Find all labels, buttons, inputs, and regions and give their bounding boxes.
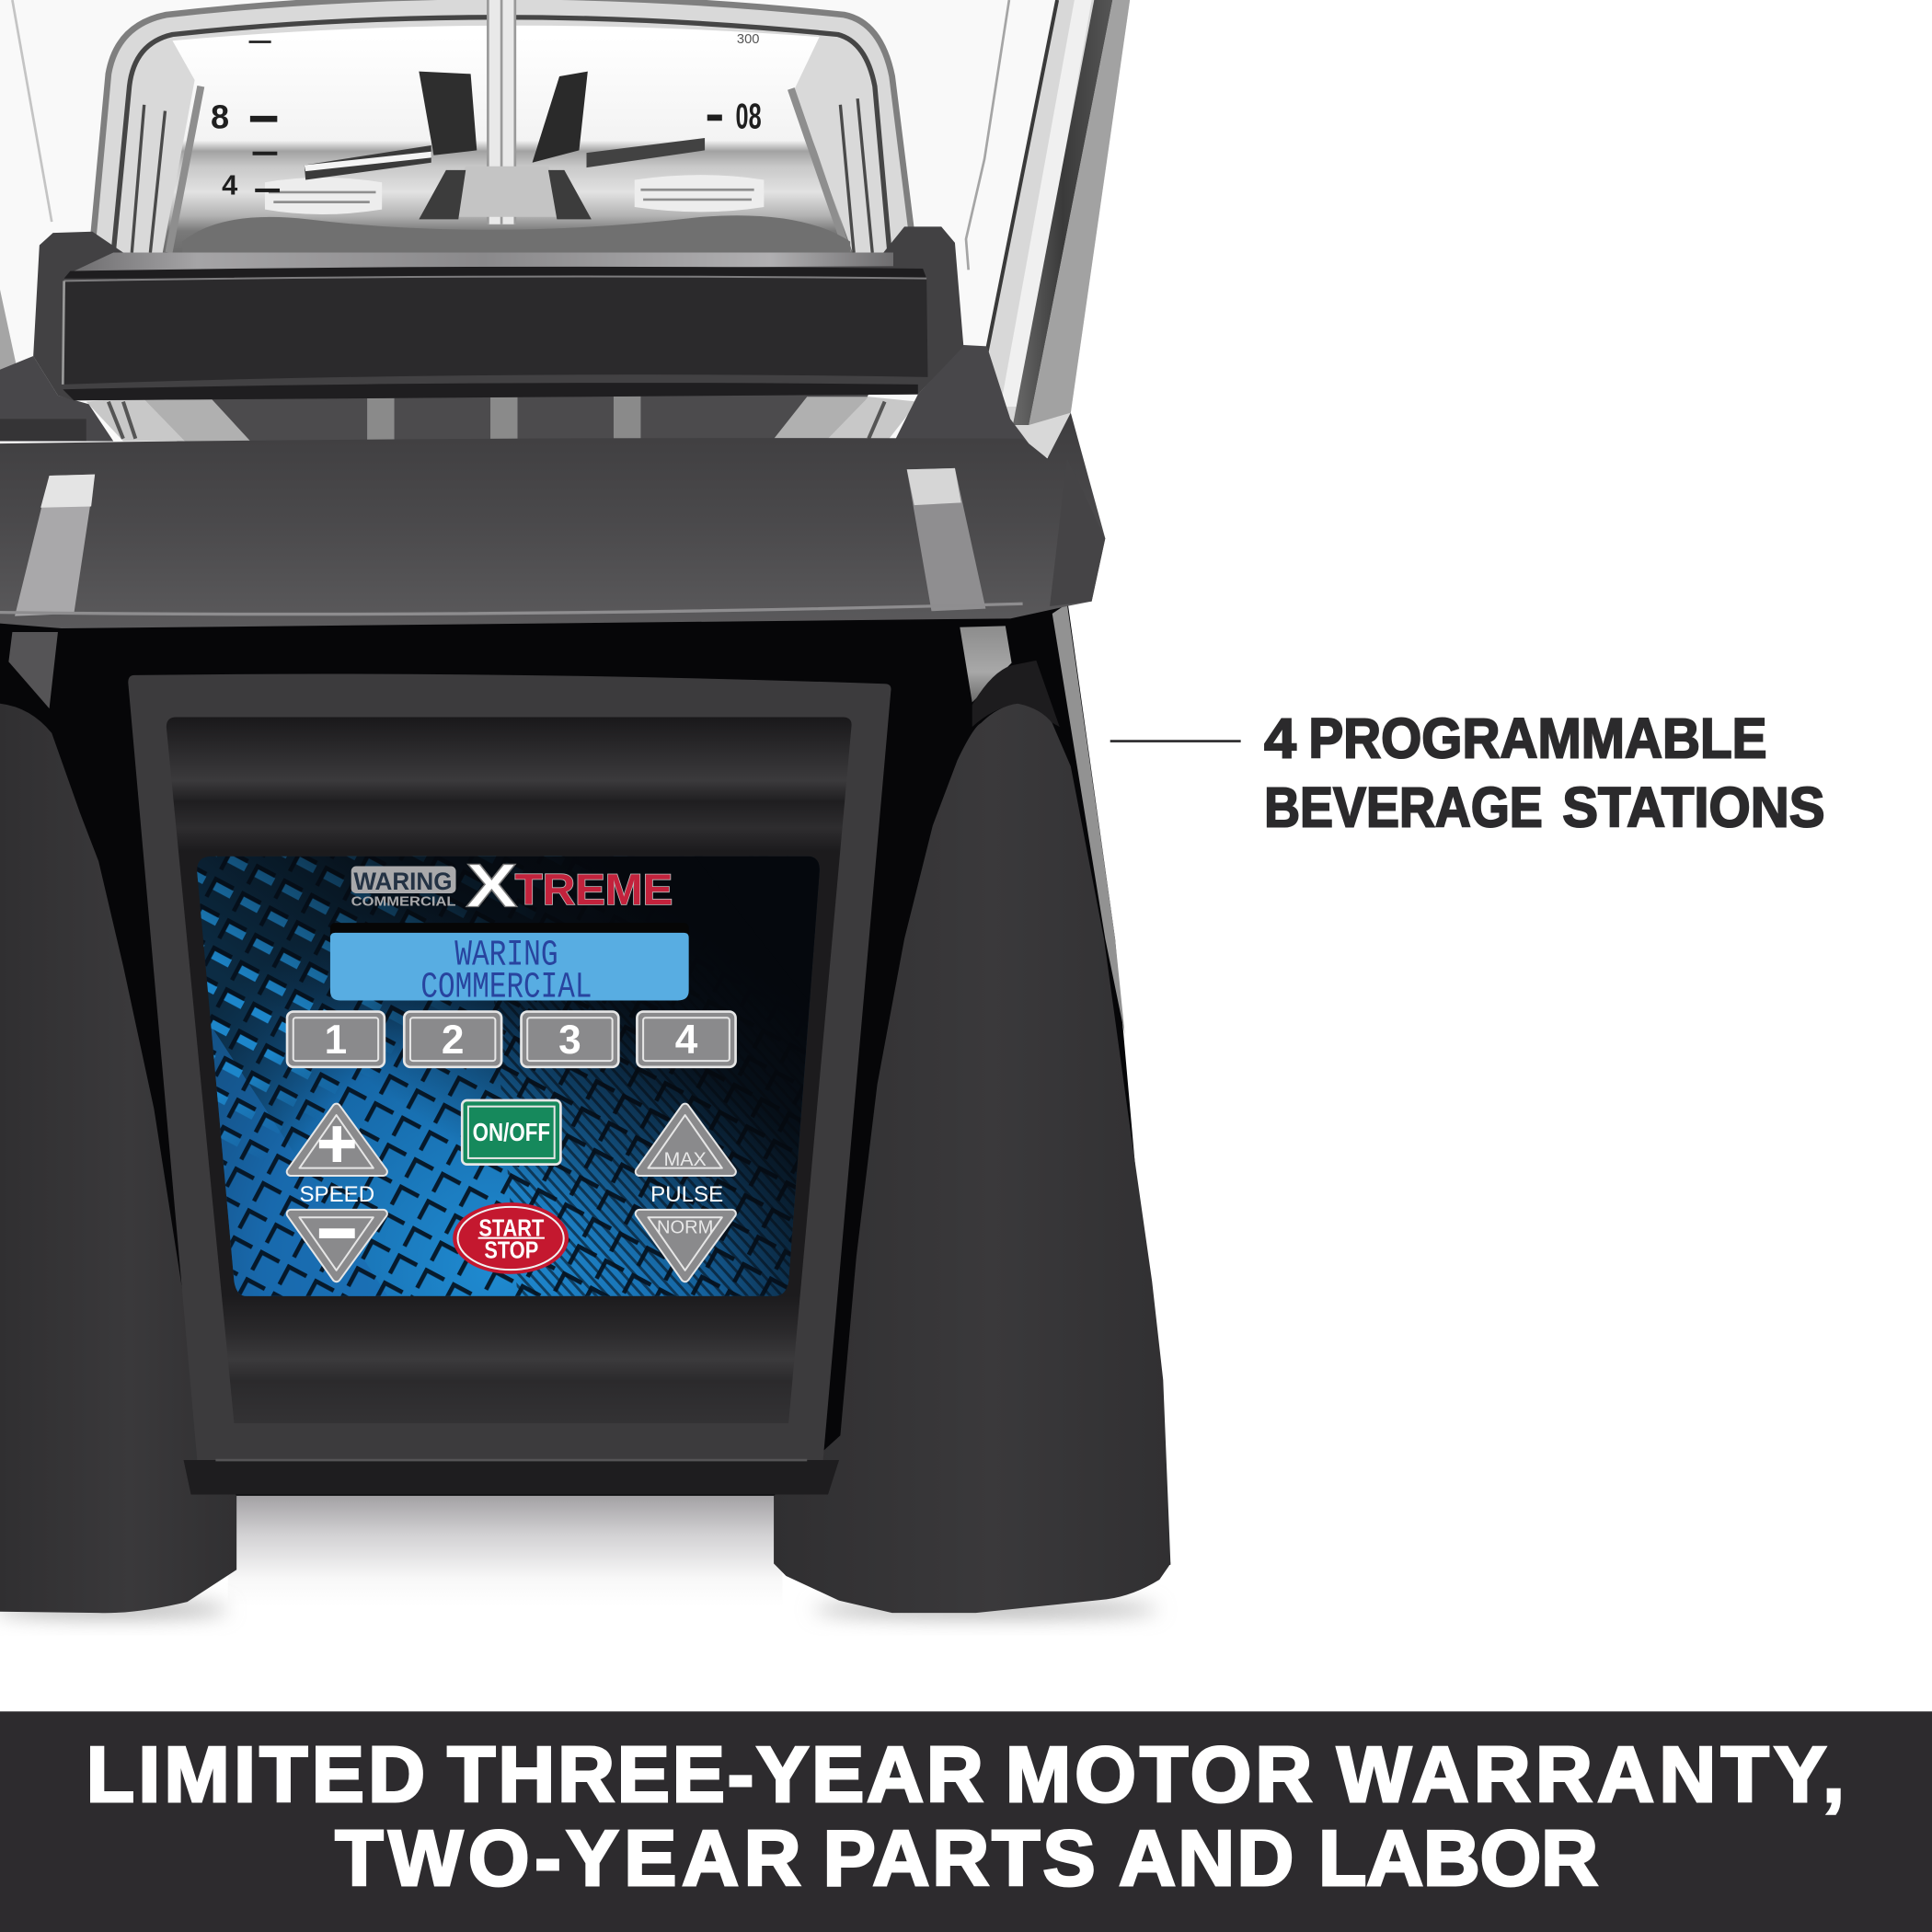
floor shadow — [0, 1496, 1158, 1617]
lcd display: WARING — [454, 936, 558, 977]
measurement marks: 4 — [222, 169, 237, 201]
banner text: TWO-YEAR — [335, 1814, 801, 1903]
measurement marks: 8 — [211, 98, 229, 135]
measurement marks — [211, 32, 762, 201]
banner text — [86, 1731, 1845, 1903]
start stop button: START — [478, 1215, 545, 1241]
lcd display — [330, 923, 689, 1008]
shoulder supports — [0, 345, 1029, 443]
measurement marks: 300 — [737, 32, 759, 47]
start stop button — [453, 1202, 569, 1274]
callout text: PROGRAMMABLE — [1308, 707, 1767, 771]
black jar pad — [33, 226, 963, 400]
station buttons 1-4 — [287, 1012, 736, 1067]
banner text: LABOR — [1318, 1814, 1598, 1903]
speed label: SPEED — [299, 1182, 374, 1207]
pulse label: PULSE — [650, 1182, 723, 1207]
reflections — [8, 632, 58, 708]
center column — [488, 0, 515, 224]
jar base visible under pad — [86, 392, 918, 443]
banner text: MOTOR — [1006, 1731, 1312, 1819]
callout text — [1264, 707, 1824, 840]
pulse buttons — [639, 1108, 732, 1278]
on/off button: ON/OFF — [473, 1118, 550, 1146]
right foot — [774, 704, 1170, 1613]
waring xtreme logo: TREME — [515, 866, 673, 914]
on/off button — [462, 1100, 560, 1165]
warranty banner — [0, 1711, 1932, 1932]
banner text: THREE-YEAR — [447, 1731, 983, 1819]
station buttons 1-4: 2 — [442, 1018, 464, 1063]
callout: programmable stations — [1110, 707, 1824, 840]
lcd display: COMMERCIAL — [420, 967, 592, 1008]
clear jar — [0, 0, 1130, 458]
waring xtreme logo: COMMERCIAL — [351, 894, 456, 909]
blades — [305, 72, 705, 219]
control panel — [185, 850, 825, 1306]
callout text: BEVERAGE — [1264, 776, 1543, 840]
collar — [0, 413, 1105, 628]
motor base — [0, 598, 1170, 1613]
start stop button: STOP — [484, 1237, 538, 1263]
measurement marks: 08 — [736, 97, 762, 136]
banner text: WARRANTY, — [1337, 1731, 1845, 1819]
waring xtreme logo: WARING — [353, 868, 453, 895]
leader line — [1110, 740, 1241, 742]
inner container — [88, 0, 914, 255]
banner text: PARTS — [823, 1814, 1096, 1903]
banner text: LIMITED — [86, 1731, 425, 1819]
callout text: STATIONS — [1562, 776, 1824, 840]
station buttons 1-4: 4 — [675, 1018, 698, 1063]
waring xtreme logo: X — [466, 852, 518, 921]
station buttons 1-4: 1 — [325, 1018, 347, 1063]
speed buttons — [291, 1108, 384, 1278]
blender product photo — [0, 0, 1170, 1617]
station buttons 1-4: 3 — [558, 1018, 581, 1063]
banner text: AND — [1119, 1814, 1294, 1903]
pulse buttons: MAX — [663, 1148, 707, 1170]
pulse buttons: NORM — [657, 1218, 713, 1238]
jar side wall — [0, 0, 1130, 458]
waring xtreme logo — [351, 852, 673, 921]
left foot — [0, 704, 236, 1613]
callout text: 4 — [1264, 707, 1296, 771]
recessed control housing — [128, 673, 891, 1495]
